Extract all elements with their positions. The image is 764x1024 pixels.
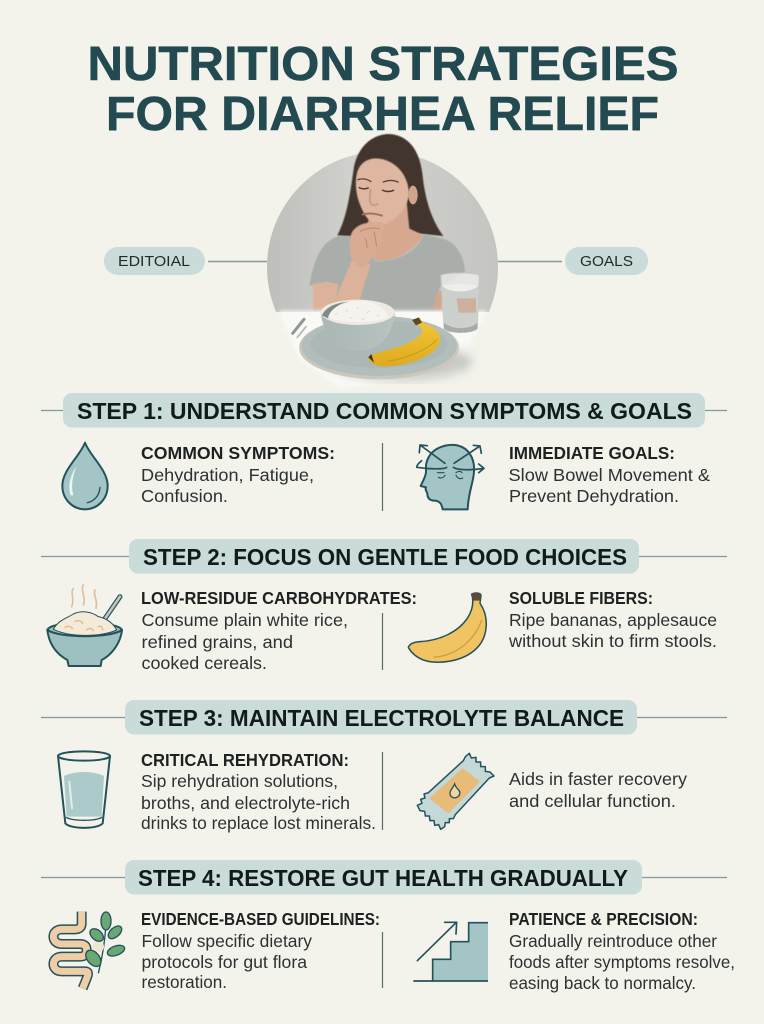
text: common symptoms: Dehydration, Fatigue, bbox=[141, 465, 314, 485]
title bbox=[88, 38, 679, 141]
text: critical rehydration: broths, and electrolyte-rich bbox=[141, 793, 350, 813]
callout: editorial label: EDITOIAL bbox=[118, 253, 190, 270]
title: NUTRITION STRATEGIES bbox=[88, 38, 679, 91]
step 2 heading bbox=[41, 539, 727, 574]
text: immediate goals bbox=[508, 443, 710, 506]
text: immediate goals: Prevent Dehydration. bbox=[509, 486, 679, 506]
face bbox=[356, 158, 409, 225]
bowl bbox=[321, 313, 395, 351]
text: recovery note: Aids in faster recovery bbox=[509, 769, 687, 789]
callout: goals label bbox=[498, 247, 648, 275]
text: patience and precision: Gradually reintroduce other bbox=[509, 931, 717, 951]
text: immediate goals: Slow Bowel Movement & bbox=[508, 465, 710, 485]
text: critical rehydration: drinks to replace lost minerals. bbox=[141, 813, 376, 833]
text: low-residue carbohydrates: Consume plain white rice, bbox=[142, 610, 348, 630]
hand bbox=[350, 222, 384, 267]
icon: water drop bbox=[62, 443, 108, 509]
step 1 heading: STEP 1: UNDERSTAND COMMON SYMPTOMS & GOALS bbox=[77, 398, 692, 424]
icon: banana bbox=[408, 593, 486, 662]
text: recovery note bbox=[509, 769, 687, 811]
text: patience and precision: foods after symptoms resolve, bbox=[509, 952, 735, 972]
text: evidence-based guidelines: EVIDENCE-BASED GUIDELINES: bbox=[141, 909, 380, 929]
text: critical rehydration bbox=[141, 750, 376, 833]
text: common symptoms: Confusion. bbox=[141, 486, 228, 506]
text: critical rehydration: CRITICAL REHYDRATION: bbox=[141, 750, 349, 770]
rice bbox=[328, 301, 389, 322]
icon: gut with leaves bbox=[53, 912, 126, 988]
callout: goals label: GOALS bbox=[580, 253, 633, 270]
right arm behind glass bbox=[433, 290, 442, 311]
text: patience and precision: easing back to normalcy. bbox=[509, 973, 696, 993]
nose shadow bbox=[370, 188, 378, 205]
text: low-residue carbohydrates bbox=[141, 588, 417, 673]
t-shirt bbox=[309, 234, 465, 311]
table bbox=[278, 311, 487, 388]
text: low-residue carbohydrates: refined grains, and bbox=[142, 632, 293, 652]
text: evidence-based guidelines: protocols for gut flora bbox=[142, 952, 307, 972]
forearm bbox=[334, 261, 371, 304]
text: evidence-based guidelines bbox=[141, 909, 380, 992]
icon: rice bowl bbox=[47, 585, 122, 666]
text: evidence-based guidelines: restoration. bbox=[142, 972, 227, 992]
text: common symptoms bbox=[141, 443, 335, 506]
text: immediate goals: IMMEDIATE GOALS: bbox=[509, 443, 675, 463]
text: patience and precision: PATIENCE & PRECISION: bbox=[509, 909, 698, 929]
text: soluble fibers: without skin to firm stools. bbox=[508, 631, 717, 651]
text: soluble fibers bbox=[508, 588, 717, 651]
step 4 heading bbox=[41, 860, 727, 894]
callout: editorial label bbox=[104, 247, 267, 275]
brows and eyes bbox=[357, 179, 399, 182]
banana bbox=[368, 318, 440, 366]
upper arm bbox=[313, 282, 338, 311]
step 1 heading bbox=[41, 393, 727, 428]
text: low-residue carbohydrates: cooked cereals. bbox=[142, 653, 267, 673]
plate bbox=[299, 316, 459, 379]
fork bbox=[293, 319, 304, 333]
text: patience and precision bbox=[509, 909, 735, 993]
water glass bbox=[441, 273, 479, 333]
hair bbox=[337, 134, 443, 237]
icon: glass of water bbox=[58, 751, 110, 828]
text: low-residue carbohydrates: LOW-RESIDUE CARBOHYDRATES: bbox=[141, 588, 417, 608]
text: soluble fibers: Ripe bananas, applesauce bbox=[509, 610, 717, 630]
icon: electrolyte sachet bbox=[417, 753, 494, 829]
icon: stairs with arrow bbox=[413, 922, 488, 981]
step 2 heading: STEP 2: FOCUS ON GENTLE FOOD CHOICES bbox=[143, 544, 627, 570]
neck and chest bbox=[363, 202, 424, 261]
step 4 heading: STEP 4: RESTORE GUT HEALTH GRADUALLY bbox=[138, 865, 628, 891]
text: evidence-based guidelines: Follow specific dietary bbox=[142, 931, 312, 951]
text: common symptoms: COMMON SYMPTOMS: bbox=[141, 443, 335, 463]
step 3 heading: STEP 3: MAINTAIN ELECTROLYTE BALANCE bbox=[139, 705, 624, 731]
mouth bbox=[362, 214, 383, 216]
text: soluble fibers: SOLUBLE FIBERS: bbox=[509, 588, 653, 608]
hero illustration: woman with rice, banana and water bbox=[267, 134, 499, 388]
icon: head with arrows bbox=[417, 445, 484, 509]
ear bbox=[408, 186, 418, 204]
text: recovery note: and cellular function. bbox=[509, 791, 676, 811]
text: critical rehydration: Sip rehydration solutions, bbox=[141, 771, 338, 791]
plate shadow bbox=[328, 343, 472, 380]
step 3 heading bbox=[41, 700, 727, 734]
title: FOR DIARRHEA RELIEF bbox=[106, 88, 659, 141]
